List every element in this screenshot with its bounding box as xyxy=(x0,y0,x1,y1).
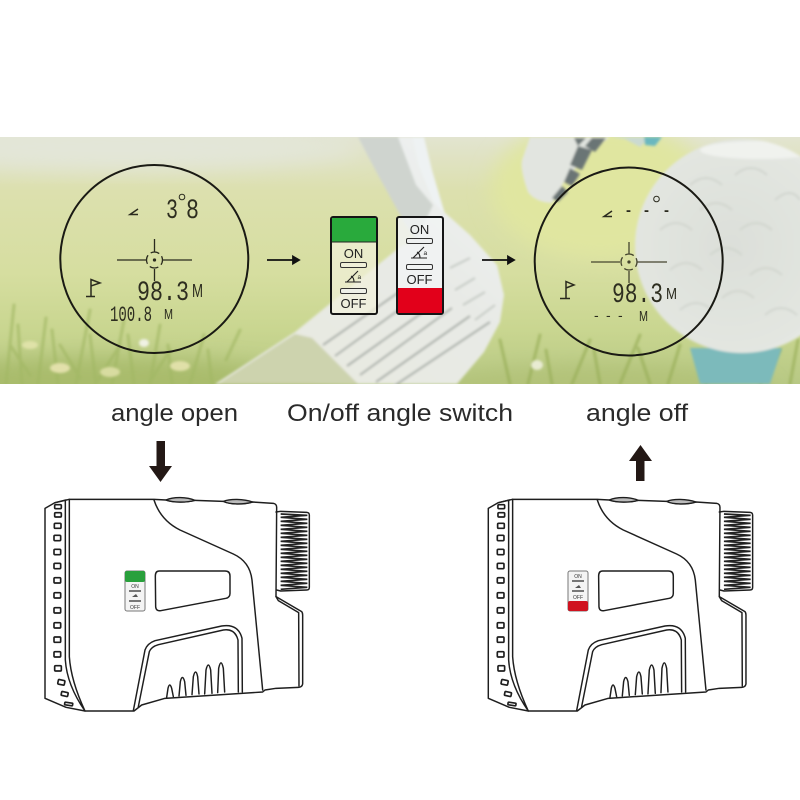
label: angle open: angle open xyxy=(111,400,238,427)
small switch: green: ON xyxy=(131,584,139,590)
reticle view: angle on xyxy=(60,165,248,353)
blank angle reading: --- xyxy=(626,202,669,219)
golf ball xyxy=(635,139,800,353)
arrow: up xyxy=(629,445,652,481)
blank second reading: --- xyxy=(594,307,623,323)
reticle view: angle on: M xyxy=(164,306,173,323)
switch: angle on (green): ON xyxy=(344,246,363,261)
blue tee xyxy=(690,348,782,384)
reticle view: angle on: 8 xyxy=(186,196,199,227)
reticle view: angle off: M xyxy=(639,308,648,325)
small switch: red xyxy=(568,571,588,611)
small switch: green: OFF xyxy=(130,605,140,611)
flag icon xyxy=(86,280,100,296)
arrow to switch xyxy=(267,256,299,264)
second distance reading: 100.8 xyxy=(110,303,152,328)
angle reading: 3 xyxy=(166,196,178,227)
photo band: golf club and ball on grass xyxy=(0,137,800,384)
reticle view: angle off xyxy=(535,168,723,356)
grass blades xyxy=(6,305,798,384)
crosshair xyxy=(591,242,667,283)
reticle view: angle off: M xyxy=(666,286,677,303)
glove xyxy=(522,137,610,203)
switch: angle on (green) xyxy=(331,217,377,314)
small switch: green xyxy=(125,571,145,611)
crosshair xyxy=(117,239,192,281)
arrow to off view xyxy=(482,256,514,264)
distance reading: 98.3 xyxy=(612,280,663,311)
switch: angle off (red): ON xyxy=(410,222,429,237)
device: angle open xyxy=(45,498,309,711)
arrow: down xyxy=(149,441,172,482)
angle icon xyxy=(604,211,612,216)
small switch: red: ON xyxy=(574,574,582,580)
switch: angle on (green): OFF xyxy=(340,296,367,311)
club face grooves xyxy=(323,258,495,386)
device: angle off xyxy=(488,498,753,711)
reticle view: angle on: M xyxy=(192,281,203,301)
angle icon xyxy=(130,209,138,214)
club shaft and head xyxy=(215,137,504,384)
label: angle off: angle off xyxy=(586,400,688,427)
switch: angle off (red): OFF xyxy=(406,272,433,287)
flag icon xyxy=(560,282,574,298)
switch: angle off (red) xyxy=(397,217,443,314)
switch: angle on (green): a xyxy=(358,274,362,281)
small switch: red: OFF xyxy=(573,595,583,601)
distance reading: 98.3 xyxy=(137,278,189,309)
heading: switch: On/off angle switch xyxy=(287,400,513,427)
switch: angle off (red): a xyxy=(424,250,428,257)
